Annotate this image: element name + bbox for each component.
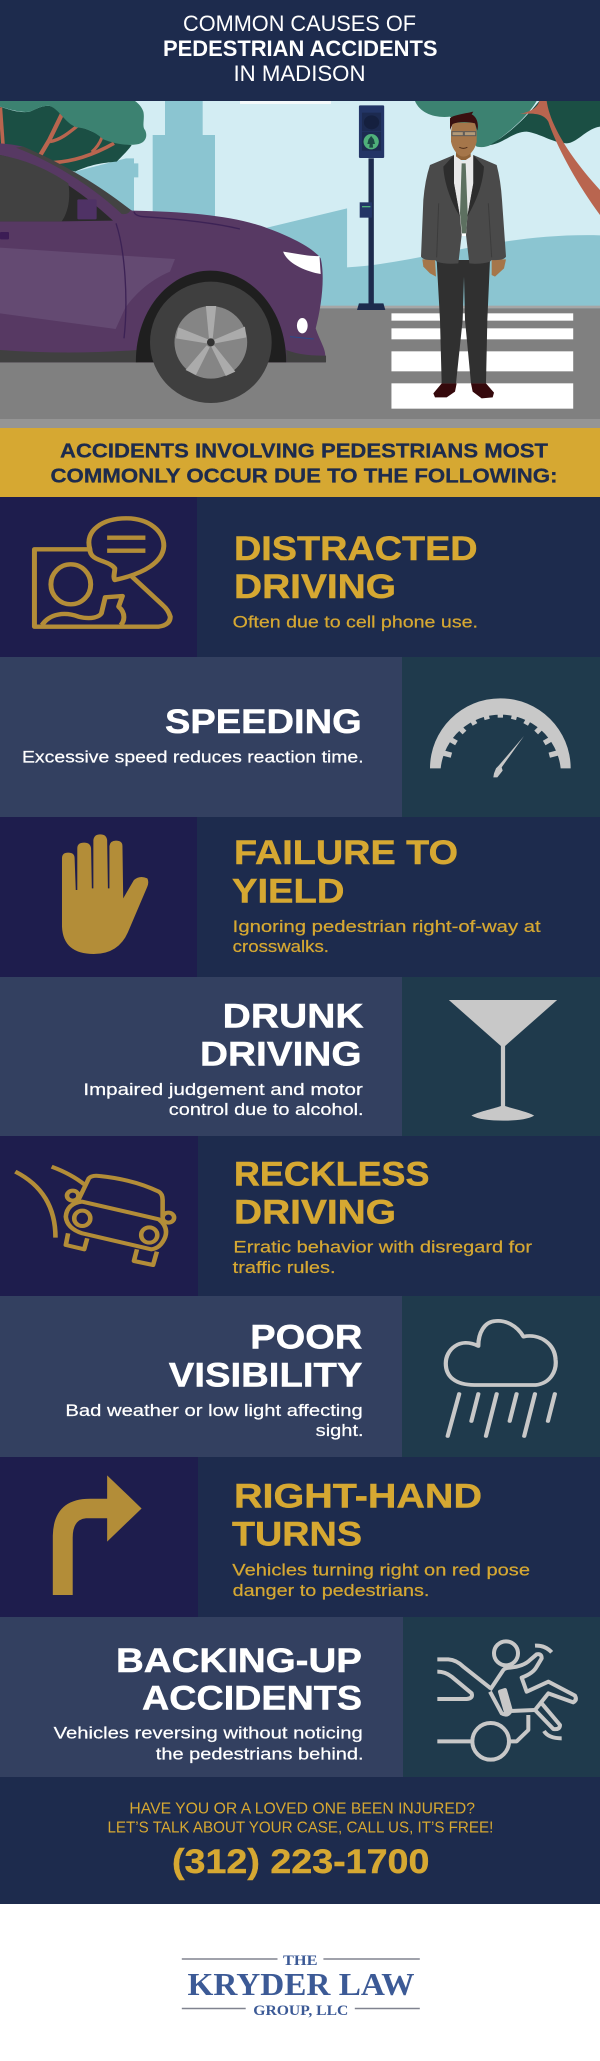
heading: DRUNK xyxy=(223,997,364,1035)
title banner xyxy=(0,0,600,101)
panel: right-hand turns: danger to pedestrians. xyxy=(233,1581,429,1600)
heading: DISTRACTED xyxy=(234,530,478,568)
panel: distracted driving xyxy=(0,497,600,657)
panel: failure to yield xyxy=(0,817,600,977)
heading: RECKLESS xyxy=(234,1155,429,1193)
heading: POOR xyxy=(250,1318,362,1356)
panel: drunk driving xyxy=(0,977,600,1136)
panel: backing-up accidents: ACCIDENTS xyxy=(142,1680,362,1718)
pedestrian signal xyxy=(357,105,385,310)
icon: swerving car xyxy=(15,1167,174,1265)
description: Excessive speed reduces reaction time. xyxy=(22,748,364,767)
gold heading band: COMMONLY OCCUR DUE TO THE FOLLOWING: xyxy=(50,466,558,488)
description: Bad weather or low light affecting xyxy=(65,1401,363,1420)
description: Vehicles turning right on red pose xyxy=(232,1560,530,1580)
heading: RIGHT-HAND xyxy=(234,1478,482,1516)
call to action: HAVE YOU OR A LOVED ONE BEEN INJURED? xyxy=(129,1801,475,1818)
panel: drunk driving: control due to alcohol. xyxy=(169,1100,364,1119)
panel: speeding xyxy=(0,657,600,817)
panel: reckless driving xyxy=(0,1136,600,1296)
icon: phone chat xyxy=(34,518,170,627)
description: Vehicles reversing without noticing xyxy=(54,1723,363,1742)
panel: right-hand turns xyxy=(0,1457,600,1617)
description: Erratic behavior with disregard for xyxy=(233,1237,533,1256)
man in suit xyxy=(421,112,506,398)
right tree xyxy=(415,101,600,215)
logo: The Kryder Law Group: KRYDER LAW xyxy=(188,1966,414,2002)
background sky, buildings and hills xyxy=(0,101,600,428)
logo: The Kryder Law Group xyxy=(182,1953,420,2019)
heading: FAILURE TO xyxy=(234,834,458,872)
icon: car hitting pedestrian xyxy=(437,1641,576,1760)
icon: speedometer xyxy=(430,698,571,777)
road xyxy=(0,306,600,428)
gold heading band: ACCIDENTS INVOLVING PEDESTRIANS MOST xyxy=(60,441,548,463)
panel: failure to yield: crosswalks. xyxy=(233,937,329,956)
panel: poor visibility xyxy=(0,1296,600,1457)
panel: failure to yield: YIELD xyxy=(232,873,344,911)
description: Often due to cell phone use. xyxy=(233,613,478,632)
car xyxy=(0,143,326,403)
logo: The Kryder Law Group: GROUP, LLC xyxy=(253,2003,348,2019)
title banner: COMMON CAUSES OF xyxy=(183,11,416,36)
panel: backing-up accidents xyxy=(0,1617,600,1777)
heading: BACKING-UP xyxy=(116,1642,362,1680)
illustration: street scene with car and pedestrian xyxy=(0,101,600,428)
gold heading band xyxy=(0,428,600,497)
panel: distracted driving: DRIVING xyxy=(234,568,396,606)
title banner: PEDESTRIAN ACCIDENTS xyxy=(163,36,438,61)
icon: martini glass xyxy=(449,1000,557,1121)
description: Ignoring pedestrian right-of-way at xyxy=(233,917,541,936)
icon: right turn arrow xyxy=(53,1475,142,1595)
panel: reckless driving: DRIVING xyxy=(234,1194,396,1232)
panel: reckless driving: traffic rules. xyxy=(233,1258,336,1277)
panel: drunk driving: DRIVING xyxy=(200,1036,362,1074)
call to action xyxy=(0,1777,600,1904)
left tree xyxy=(0,101,146,172)
icon: raised hand xyxy=(62,834,148,954)
title banner: IN MADISON xyxy=(234,61,366,86)
panel: poor visibility: sight. xyxy=(316,1421,364,1440)
panel: poor visibility: VISIBILITY xyxy=(169,1357,362,1395)
panel: backing-up accidents: the pedestrians behind. xyxy=(156,1744,364,1763)
icon: rain cloud xyxy=(446,1321,556,1436)
heading: SPEEDING xyxy=(165,703,362,741)
call to action: LET’S TALK ABOUT YOUR CASE, CALL US, IT’S FREE! xyxy=(108,1819,493,1836)
phone number: (312) 223-1700 xyxy=(172,1843,429,1881)
description: Impaired judgement and motor xyxy=(83,1080,363,1099)
crosswalk xyxy=(391,313,573,409)
panel: right-hand turns: TURNS xyxy=(232,1516,362,1554)
logo: The Kryder Law Group: THE xyxy=(283,1953,318,1969)
